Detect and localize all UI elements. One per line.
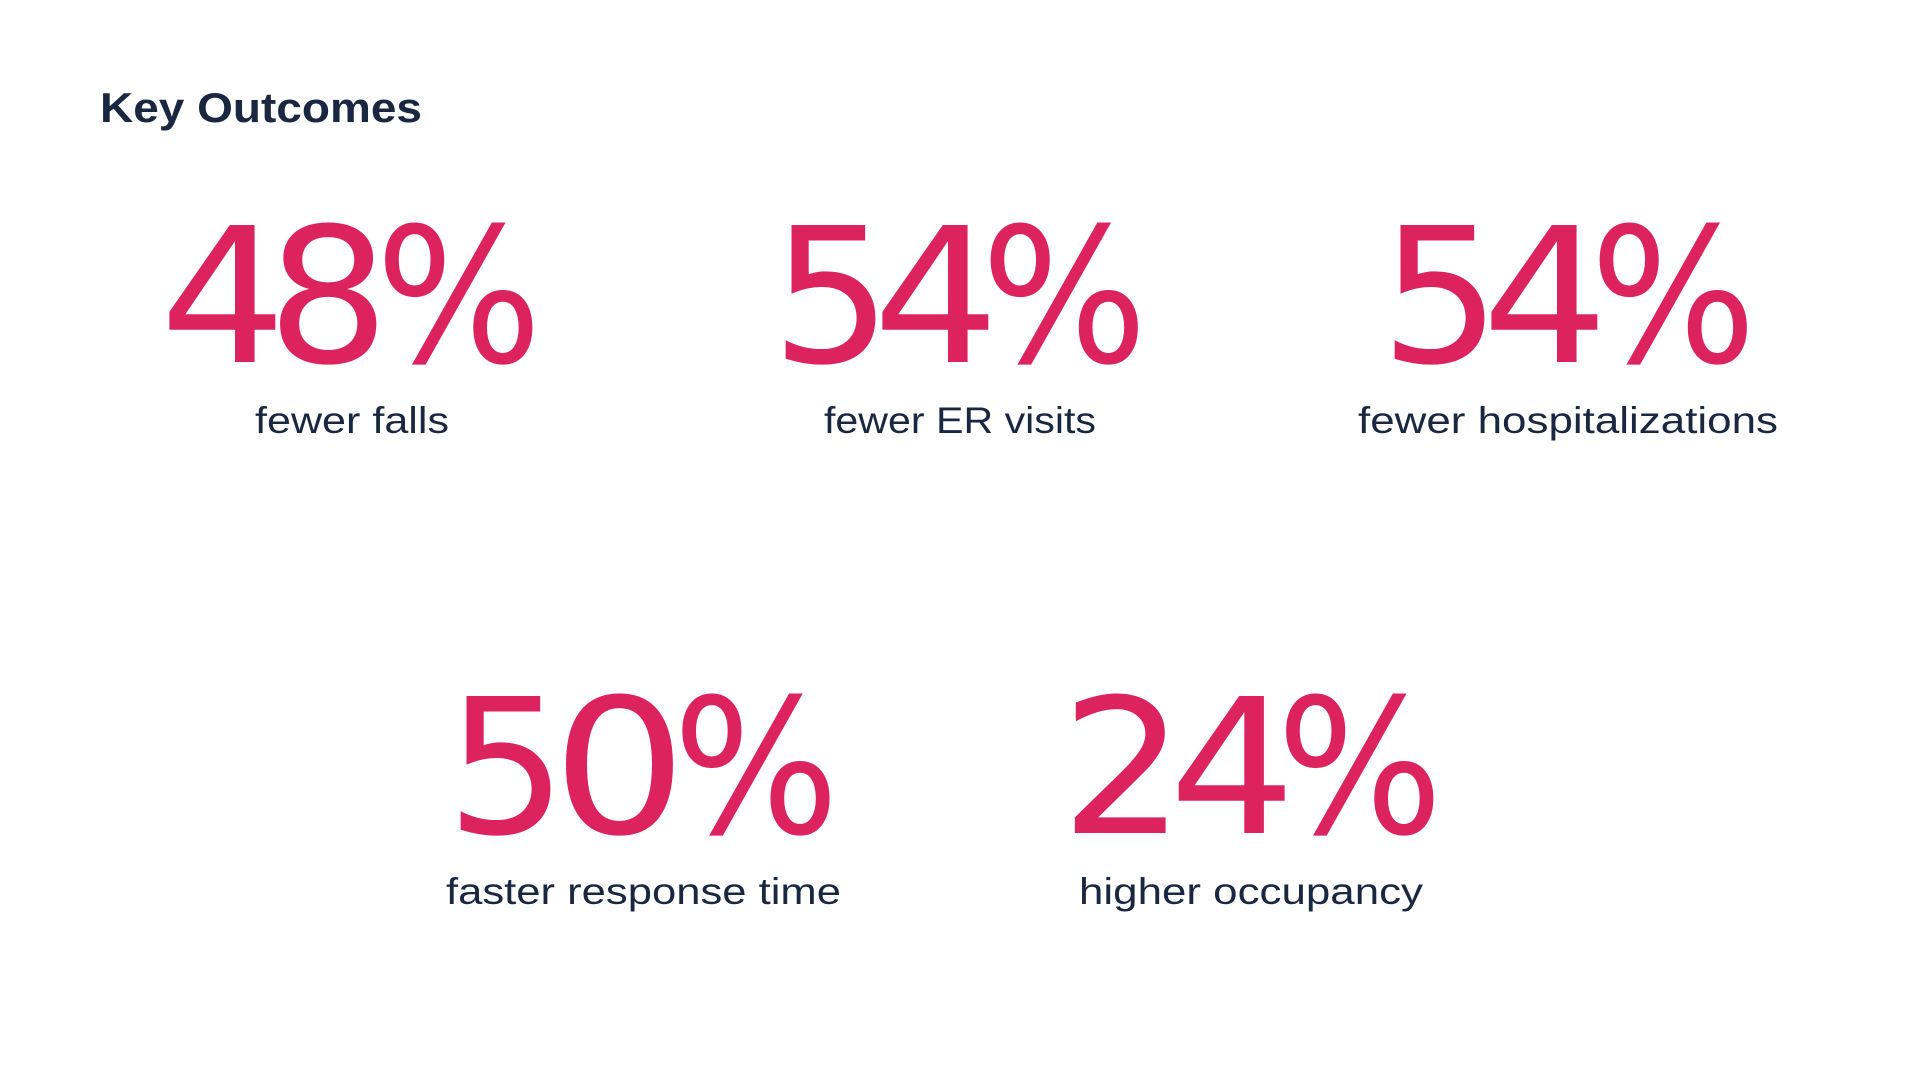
number: 50%: 0	[552, 659, 687, 878]
stat: fewer hospitalizations	[1358, 188, 1778, 441]
label: faster response time: faster response time	[446, 871, 841, 912]
label: higher occupancy: higher occupancy	[1079, 871, 1424, 912]
number: 48%: 4	[160, 188, 286, 407]
number: 54%: %	[1590, 188, 1756, 407]
stat: higher occupancy	[1060, 659, 1443, 912]
number: 24%: 4	[1169, 659, 1296, 878]
number: 54%: 5	[1380, 188, 1501, 407]
stat: fewer ER visits	[771, 188, 1148, 441]
number: 54%: %	[981, 188, 1148, 407]
label: fewer falls: fewer falls	[255, 400, 449, 441]
number: 24%: 2	[1060, 659, 1185, 878]
number: 48%: %	[376, 188, 542, 407]
number: 54%: 4	[1482, 188, 1608, 407]
stat: fewer falls	[160, 188, 542, 441]
number: 24%: %	[1276, 659, 1443, 878]
number: 50%: %	[673, 659, 839, 878]
number: 54%: 5	[771, 188, 892, 407]
title: Key Outcomes	[100, 84, 422, 131]
stat: faster response time	[446, 659, 841, 912]
number: 48%: 8	[267, 188, 390, 407]
label: fewer hospitalizations: fewer hospitalizations	[1358, 400, 1778, 441]
number: 50%: 5	[446, 659, 567, 878]
label: fewer ER visits: fewer ER visits	[824, 400, 1096, 441]
number: 54%: 4	[873, 188, 1000, 407]
